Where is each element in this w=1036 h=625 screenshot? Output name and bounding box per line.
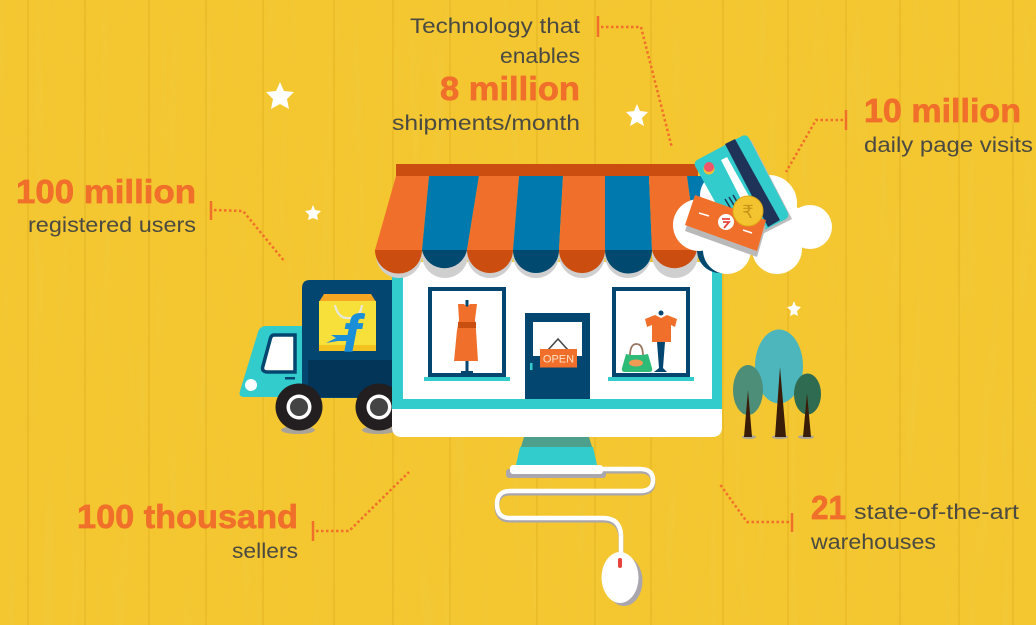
truck wheels — [276, 384, 402, 430]
wallet — [685, 195, 766, 257]
wheel shadows — [281, 426, 396, 434]
monitor stand — [516, 437, 597, 465]
stat: 100 thousand sellers: 100 thousand — [77, 498, 298, 535]
stat: 10 million daily page visits: daily page visits — [864, 134, 1033, 157]
stat: 21 state-of-the-art warehouses: 21 — [811, 489, 846, 526]
keyboard cable and mouse — [497, 465, 653, 606]
awning shadow — [376, 232, 698, 278]
connector: users — [211, 201, 285, 262]
truck box — [302, 280, 395, 398]
shopping bag logo — [319, 294, 376, 363]
shopping bag logo: f — [343, 305, 365, 363]
stat: 21 state-of-the-art warehouses: warehouses — [810, 531, 936, 554]
awning scallops — [375, 250, 743, 273]
payment cloud with card and wallet — [673, 135, 832, 274]
stat: technology 8 million shipments — [392, 15, 580, 135]
trees — [733, 330, 821, 439]
truck cab — [240, 326, 303, 397]
stat: 100 million registered users: registered users — [28, 214, 196, 237]
connector: page visits — [786, 110, 846, 172]
awning stripes — [375, 176, 725, 250]
connector: technology — [598, 16, 672, 148]
wallet: ₹ — [742, 202, 754, 222]
storefront monitor — [392, 262, 722, 437]
connector: sellers — [313, 472, 409, 541]
left window with dress — [424, 289, 510, 381]
door with open sign: OPEN — [543, 354, 574, 366]
stat: 21 state-of-the-art warehouses: state-of-the-art — [854, 501, 1019, 524]
stat: 100 thousand sellers: sellers — [232, 540, 298, 563]
awning — [375, 164, 743, 278]
stat: 10 million daily page visits — [864, 92, 1033, 157]
stars — [266, 82, 801, 316]
stat: 100 thousand sellers — [77, 498, 298, 563]
stat: technology 8 million shipments: 8 million — [440, 70, 580, 107]
stat: 100 million registered users: 100 million — [16, 173, 196, 210]
stat: 21 state-of-the-art warehouses — [810, 489, 1019, 554]
right window with shirt and handbag — [608, 289, 694, 381]
mouse — [602, 552, 642, 606]
stat: 10 million daily page visits: 10 million — [864, 92, 1021, 129]
awning top bar — [396, 164, 698, 176]
stat: technology 8 million shipments: Technology that — [410, 15, 580, 38]
connector: warehouses — [719, 483, 792, 532]
credit card — [695, 135, 792, 246]
cloud — [673, 173, 832, 274]
door with open sign — [525, 313, 590, 399]
stat: technology 8 million shipments: enables — [500, 45, 580, 68]
monitor body — [392, 262, 722, 437]
delivery truck — [240, 280, 402, 434]
stat: technology 8 million shipments: shipments/month — [392, 112, 580, 135]
stat: 100 million registered users — [16, 173, 196, 237]
